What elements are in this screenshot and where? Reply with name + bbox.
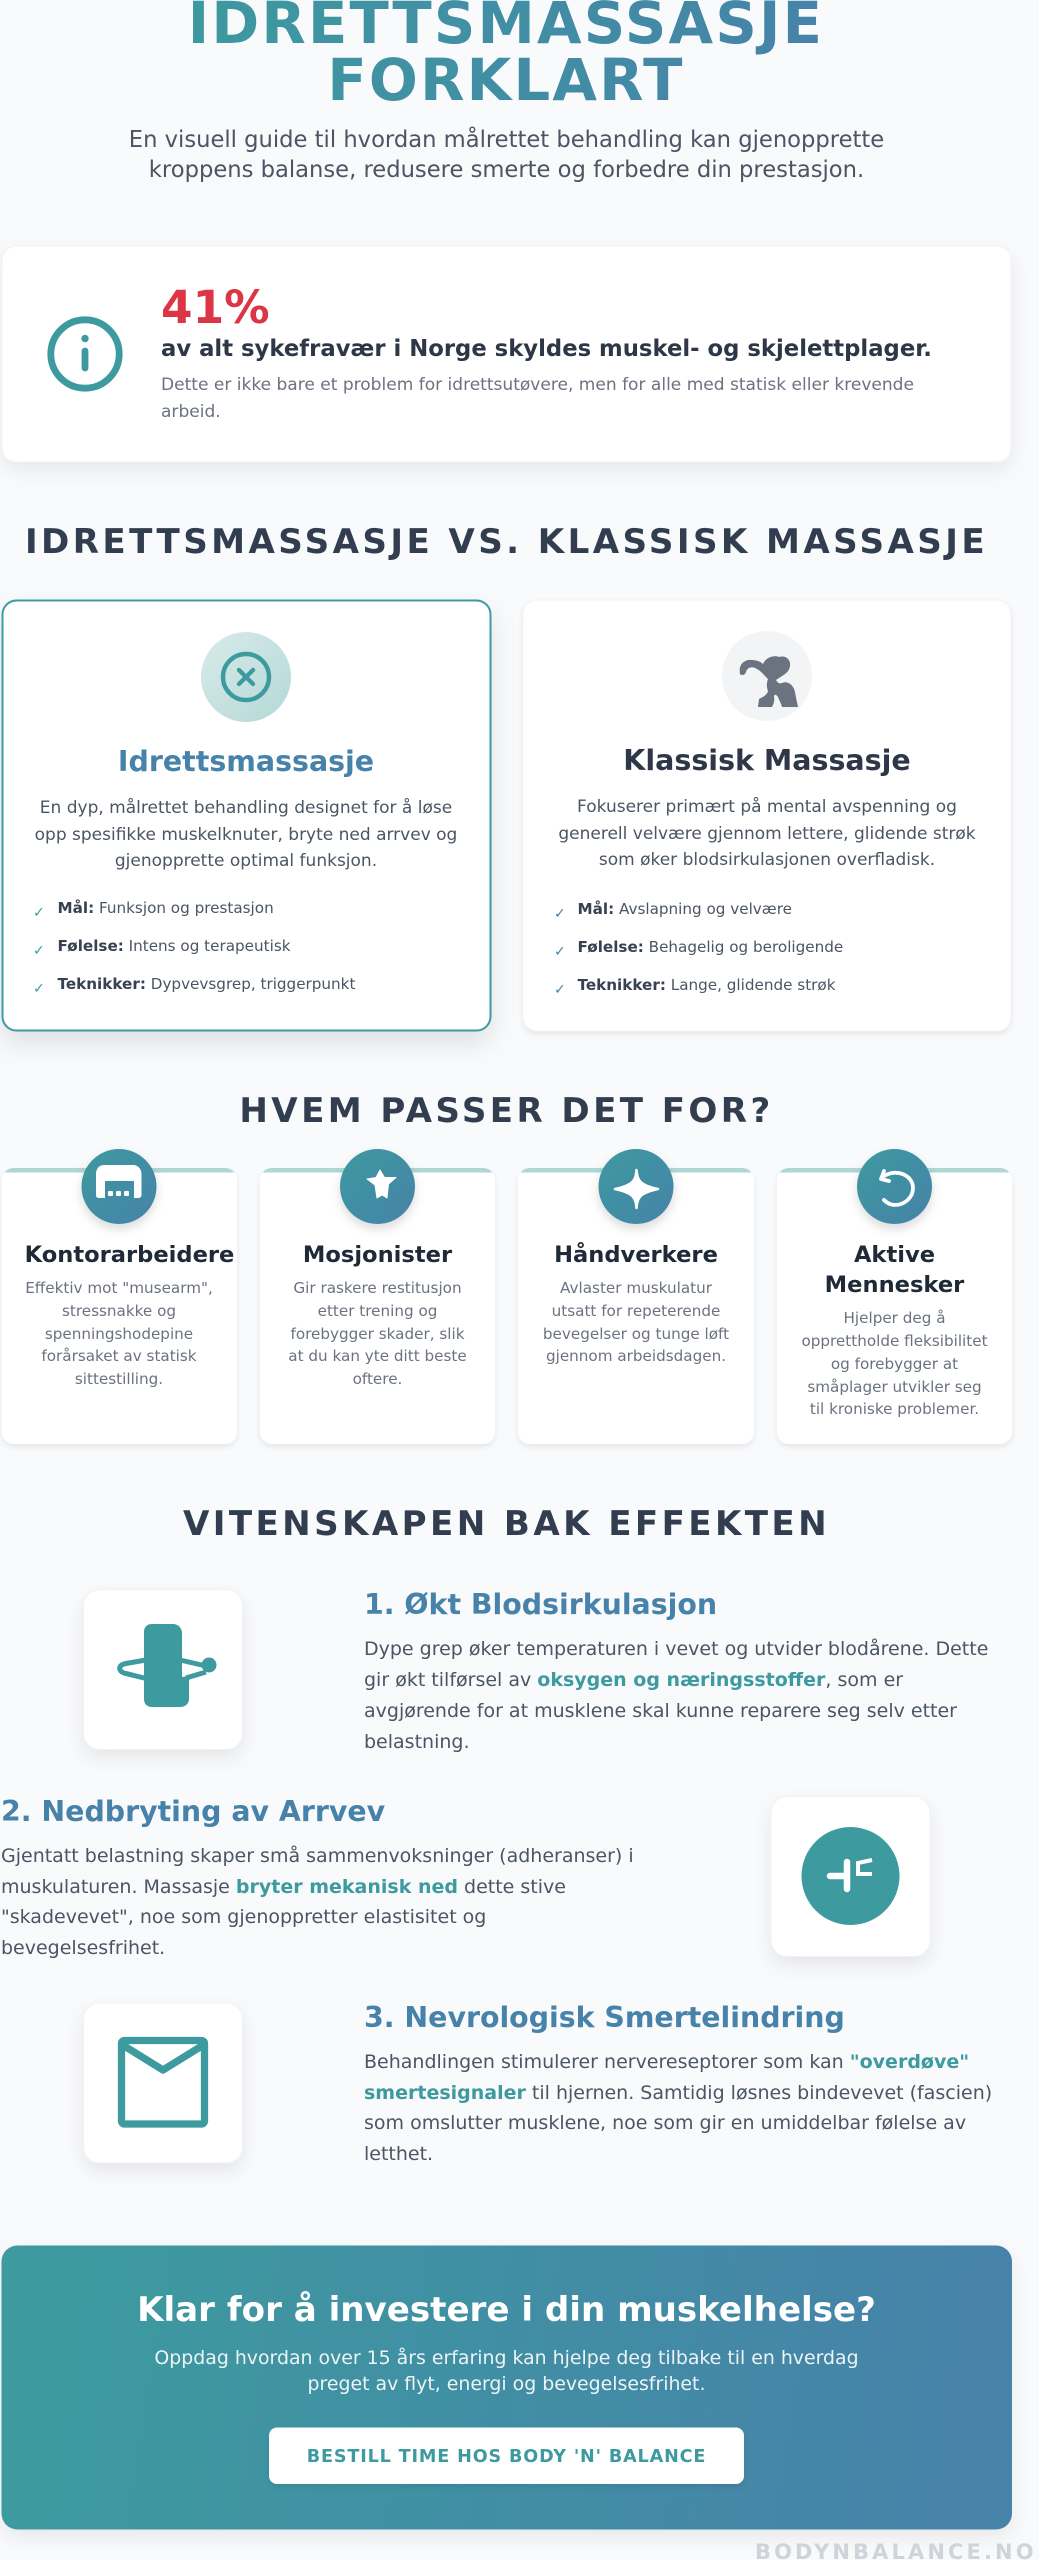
card description: Effektiv mot "musearm", <box>25 1279 213 1297</box>
icon: monitor <box>82 1149 156 1224</box>
text: scar tissue <box>1 1795 634 1959</box>
text: pain relief: Behandlingen stimulerer nervereseptorer som kan "overdøve" <box>364 2051 969 2073</box>
heading: science: VITENSKAPEN BAK EFFEKTEN <box>183 1504 830 1544</box>
subtitle: En visuell guide til hvordan målrettet behandling kan gjenopprette <box>129 125 884 153</box>
card description: spenningshodepine <box>45 1325 193 1343</box>
card title: Mennesker <box>825 1272 965 1298</box>
subtitle <box>129 125 884 183</box>
card title: Aktive <box>854 1242 935 1268</box>
card description: stressnakke og <box>62 1302 176 1320</box>
card description: Avlaster muskulatur <box>560 1279 713 1297</box>
feature list: Teknikker: Dypvevsgrep, triggerpunkt <box>58 975 355 993</box>
feature list: ✓ <box>33 943 45 959</box>
text: scar tissue: bevegelsesfrihet. <box>1 1937 165 1959</box>
feature list: Mål: Funksjon og prestasjon <box>58 899 274 917</box>
text: scar tissue: muskulaturen. Massasje bryter mekanisk ned dette stive <box>1 1876 566 1898</box>
card description: forårsaket av statisk <box>41 1347 197 1365</box>
statistic description: arbeid. <box>161 402 221 422</box>
statistic statement: av alt sykefravær i Norge skyldes muskel- og skjelettplager. <box>161 336 932 362</box>
card description: Fokuserer primært på mental avspenning og <box>577 796 957 817</box>
subtitle: kroppens balanse, redusere smerte og forbedre din prestasjon. <box>149 157 864 183</box>
feature list <box>33 899 355 997</box>
icon: info <box>51 320 119 388</box>
icon: target circle <box>201 632 291 722</box>
icon card: blood circulation <box>84 1590 242 1750</box>
statistic number: 41% <box>161 281 270 334</box>
statistic description <box>161 375 914 422</box>
card description: gjennom arbeidsdagen. <box>546 1347 726 1365</box>
card description <box>543 1279 729 1365</box>
panel: aktive mennesker <box>777 1149 1012 1444</box>
text: pain relief: som omslutter musklene, noe som gir en umiddelbar følelse av <box>364 2112 966 2134</box>
panel: klassisk massasje <box>523 600 1011 1031</box>
text: blood circulation: 1. Økt Blodsirkulasjon <box>364 1588 717 1621</box>
cta text: preget av flyt, energi og bevegelsesfrihet. <box>308 2373 705 2395</box>
card description: oftere. <box>353 1370 402 1388</box>
feature list: Teknikker: Lange, glidende strøk <box>578 976 836 994</box>
card description: småplager utvikler seg <box>807 1378 982 1396</box>
card description <box>558 796 976 870</box>
feature list: ✓ <box>554 944 566 960</box>
feature list: ✓ <box>554 982 566 998</box>
card description: gjenopprette optimal funksjon. <box>115 851 377 871</box>
text: blood circulation: avgjørende for at musklene skal kunne reparere seg selv etter <box>364 1700 957 1722</box>
cta button <box>269 2428 744 2484</box>
text: pain relief: letthet. <box>364 2143 433 2165</box>
icon: hand blob <box>722 631 812 721</box>
card title: Håndverkere <box>554 1241 718 1268</box>
text: pain relief: smertesignaler til hjernen. Samtidig løsnes bindevevet (fascien) <box>364 2082 992 2104</box>
card description: sittestilling. <box>75 1370 163 1388</box>
feature list: ✓ <box>33 981 45 997</box>
panel: mosjonister <box>260 1149 495 1444</box>
title <box>188 0 824 114</box>
card description: til kroniske problemer. <box>810 1400 979 1418</box>
card description <box>25 1279 213 1388</box>
icon card: scar tissue <box>771 1796 930 1956</box>
icon card: envelope <box>84 2003 242 2163</box>
icon: star <box>340 1149 415 1224</box>
card description: Gir raskere restitusjon <box>293 1279 462 1297</box>
panel: håndverkere <box>518 1149 754 1444</box>
card title: Mosjonister <box>303 1242 453 1268</box>
panel: idrettsmassasje <box>2 600 490 1030</box>
text: blood circulation <box>364 1588 988 1753</box>
card description: bevegelser og tunge løft <box>543 1325 729 1343</box>
card description <box>288 1279 467 1388</box>
text: blood circulation: belastning. <box>364 1731 469 1753</box>
panel: call to action <box>2 2246 1012 2530</box>
heading: target groups: HVEM PASSER DET FOR? <box>239 1091 774 1131</box>
cta text: Oppdag hvordan over 15 års erfaring kan hjelpe deg tilbake til en hverdag <box>154 2346 859 2369</box>
card description: opp spesifikke muskelknuter, bryte ned arrvev og <box>35 825 457 845</box>
text: scar tissue: Gjentatt belastning skaper små sammenvoksninger (adheranser) i <box>1 1844 634 1867</box>
card description: utsatt for repeterende <box>552 1302 720 1320</box>
text: scar tissue: 2. Nedbryting av Arrvev <box>1 1795 386 1828</box>
feature list: Mål: Avslapning og velvære <box>578 900 792 918</box>
card description: Hjelper deg å <box>843 1309 946 1327</box>
panel: statistic <box>2 246 1011 462</box>
text: scar tissue: "skadevevet", noe som gjenoppretter elastisitet og <box>1 1906 486 1928</box>
card description: at du kan yte ditt beste <box>288 1347 467 1365</box>
card description <box>801 1309 988 1418</box>
feature list: ✓ <box>554 906 566 922</box>
title: FORKLART <box>327 47 685 114</box>
panel: kontorarbeidere <box>2 1149 237 1444</box>
text: pain relief <box>364 2001 992 2165</box>
cta button: BESTILL TIME HOS BODY 'N' BALANCE <box>307 2447 706 2467</box>
card title: Klassisk Massasje <box>623 744 911 777</box>
feature list: ✓ <box>33 905 45 921</box>
feature list: Følelse: Intens og terapeutisk <box>58 937 291 955</box>
card description: generell velvære gjennom lettere, glidende strøk <box>558 824 976 844</box>
card description: og forebygger at <box>831 1355 958 1373</box>
cta heading: Klar for å investere i din muskelhelse? <box>137 2290 876 2330</box>
card description: som øker blodsirkulasjonen overfladisk. <box>599 850 935 870</box>
text: pain relief: 3. Nevrologisk Smertelindring <box>364 2001 845 2034</box>
card title: Idrettsmassasje <box>118 745 374 778</box>
feature list: Følelse: Behagelig og beroligende <box>578 938 843 956</box>
card description: opprettholde fleksibilitet <box>801 1332 988 1350</box>
card title: Kontorarbeidere <box>25 1242 234 1268</box>
icon: rotate arrow <box>857 1149 932 1224</box>
card description: En dyp, målrettet behandling designet for å løse <box>40 797 452 818</box>
icon: sparkle <box>598 1149 674 1224</box>
text: blood circulation: Dype grep øker temperaturen i vevet og utvider blodårene. Dette <box>364 1637 988 1660</box>
card description: forebygger skader, slik <box>290 1325 465 1343</box>
feature list <box>554 900 843 998</box>
card description <box>35 797 457 871</box>
card description: etter trening og <box>318 1302 437 1320</box>
card title <box>825 1242 965 1298</box>
text: blood circulation: gir økt tilførsel av oksygen og næringsstoffer, som er <box>364 1669 903 1691</box>
heading: comparison: IDRETTSMASSASJE VS. KLASSISK MASSASJE <box>25 522 988 562</box>
statistic description: Dette er ikke bare et problem for idrettsutøvere, men for alle med statisk eller krevende <box>161 375 914 395</box>
cta text <box>154 2346 859 2395</box>
